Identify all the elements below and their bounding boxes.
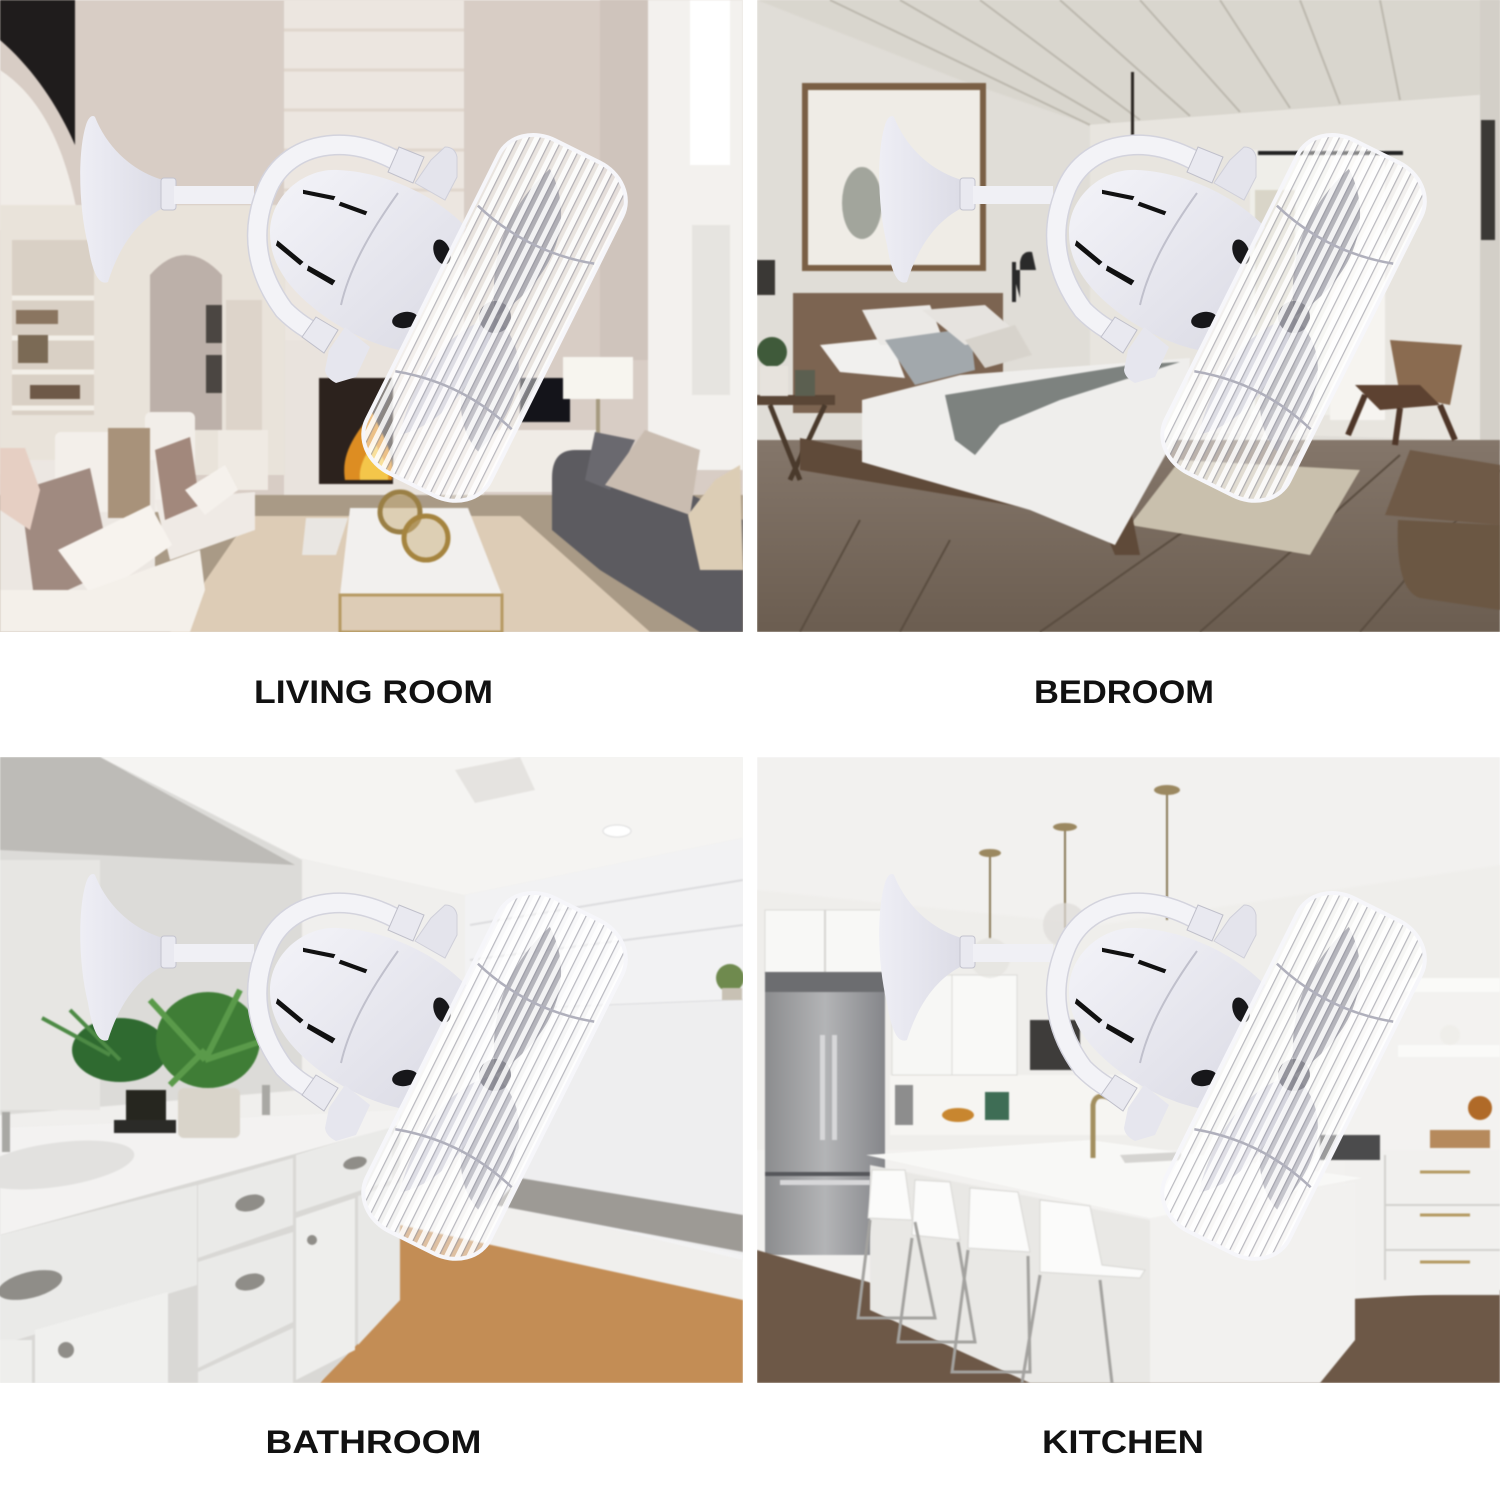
label: kitchen: KITCHEN [1042,1424,1204,1460]
pebble shower floor [495,1178,743,1252]
fan product image [879,116,1438,515]
framed wall art [802,83,986,271]
wood floor [757,1250,1500,1383]
countertop items and shelves [895,978,1500,1148]
nightstand and plant [757,337,835,480]
label: bathroom: BATHROOM [266,1424,482,1460]
marble countertop and sink [0,1085,400,1235]
panel: living room [0,0,743,632]
stool legs [858,1220,1112,1383]
ceiling [456,757,630,836]
panel: bathroom [0,757,744,1383]
shower tile wall [470,879,743,1006]
rug [1130,460,1360,555]
duvet and pillows [820,305,1190,545]
potted plants [42,990,265,1138]
back wall and window [1090,0,1500,450]
fan product image [879,874,1438,1273]
fan product image [80,116,639,515]
label: bedroom: BEDROOM [1034,674,1214,710]
wood floor [757,440,1500,632]
plank ceiling [757,0,1500,125]
mirror [0,757,302,1115]
upper cabinets [765,910,1080,1075]
bar stools [868,1170,1145,1278]
stainless fridge [765,972,885,1255]
label: living room: LIVING ROOM [254,674,493,710]
bed frame [800,438,1140,555]
wooden chair [1348,340,1462,445]
panel: kitchen [757,757,1500,1383]
right base cabinets [1320,1135,1500,1295]
bench with basket [1385,450,1500,610]
window column [600,0,743,470]
grey sofa and pillows [552,430,743,632]
balcony railing [0,0,76,206]
vanity handles [0,1154,368,1358]
back wall and backsplash [757,865,1500,1150]
wood floor [320,1225,743,1383]
tv and cabinet [480,357,633,492]
pendant lights [970,785,1180,978]
fireplace [319,378,393,484]
kitchen island [866,1096,1362,1383]
fan product image [80,874,639,1273]
pendant and wall lamp [757,72,1134,302]
panel: bedroom [757,0,1500,632]
floor and rug [0,495,743,632]
headboard [793,293,1003,413]
vanity cabinets [0,1112,400,1383]
built-in shelves and arch [0,205,285,490]
brick chimney [284,0,484,510]
left armchairs and pillows [0,412,255,632]
coffee table with gold spheres [302,492,502,632]
